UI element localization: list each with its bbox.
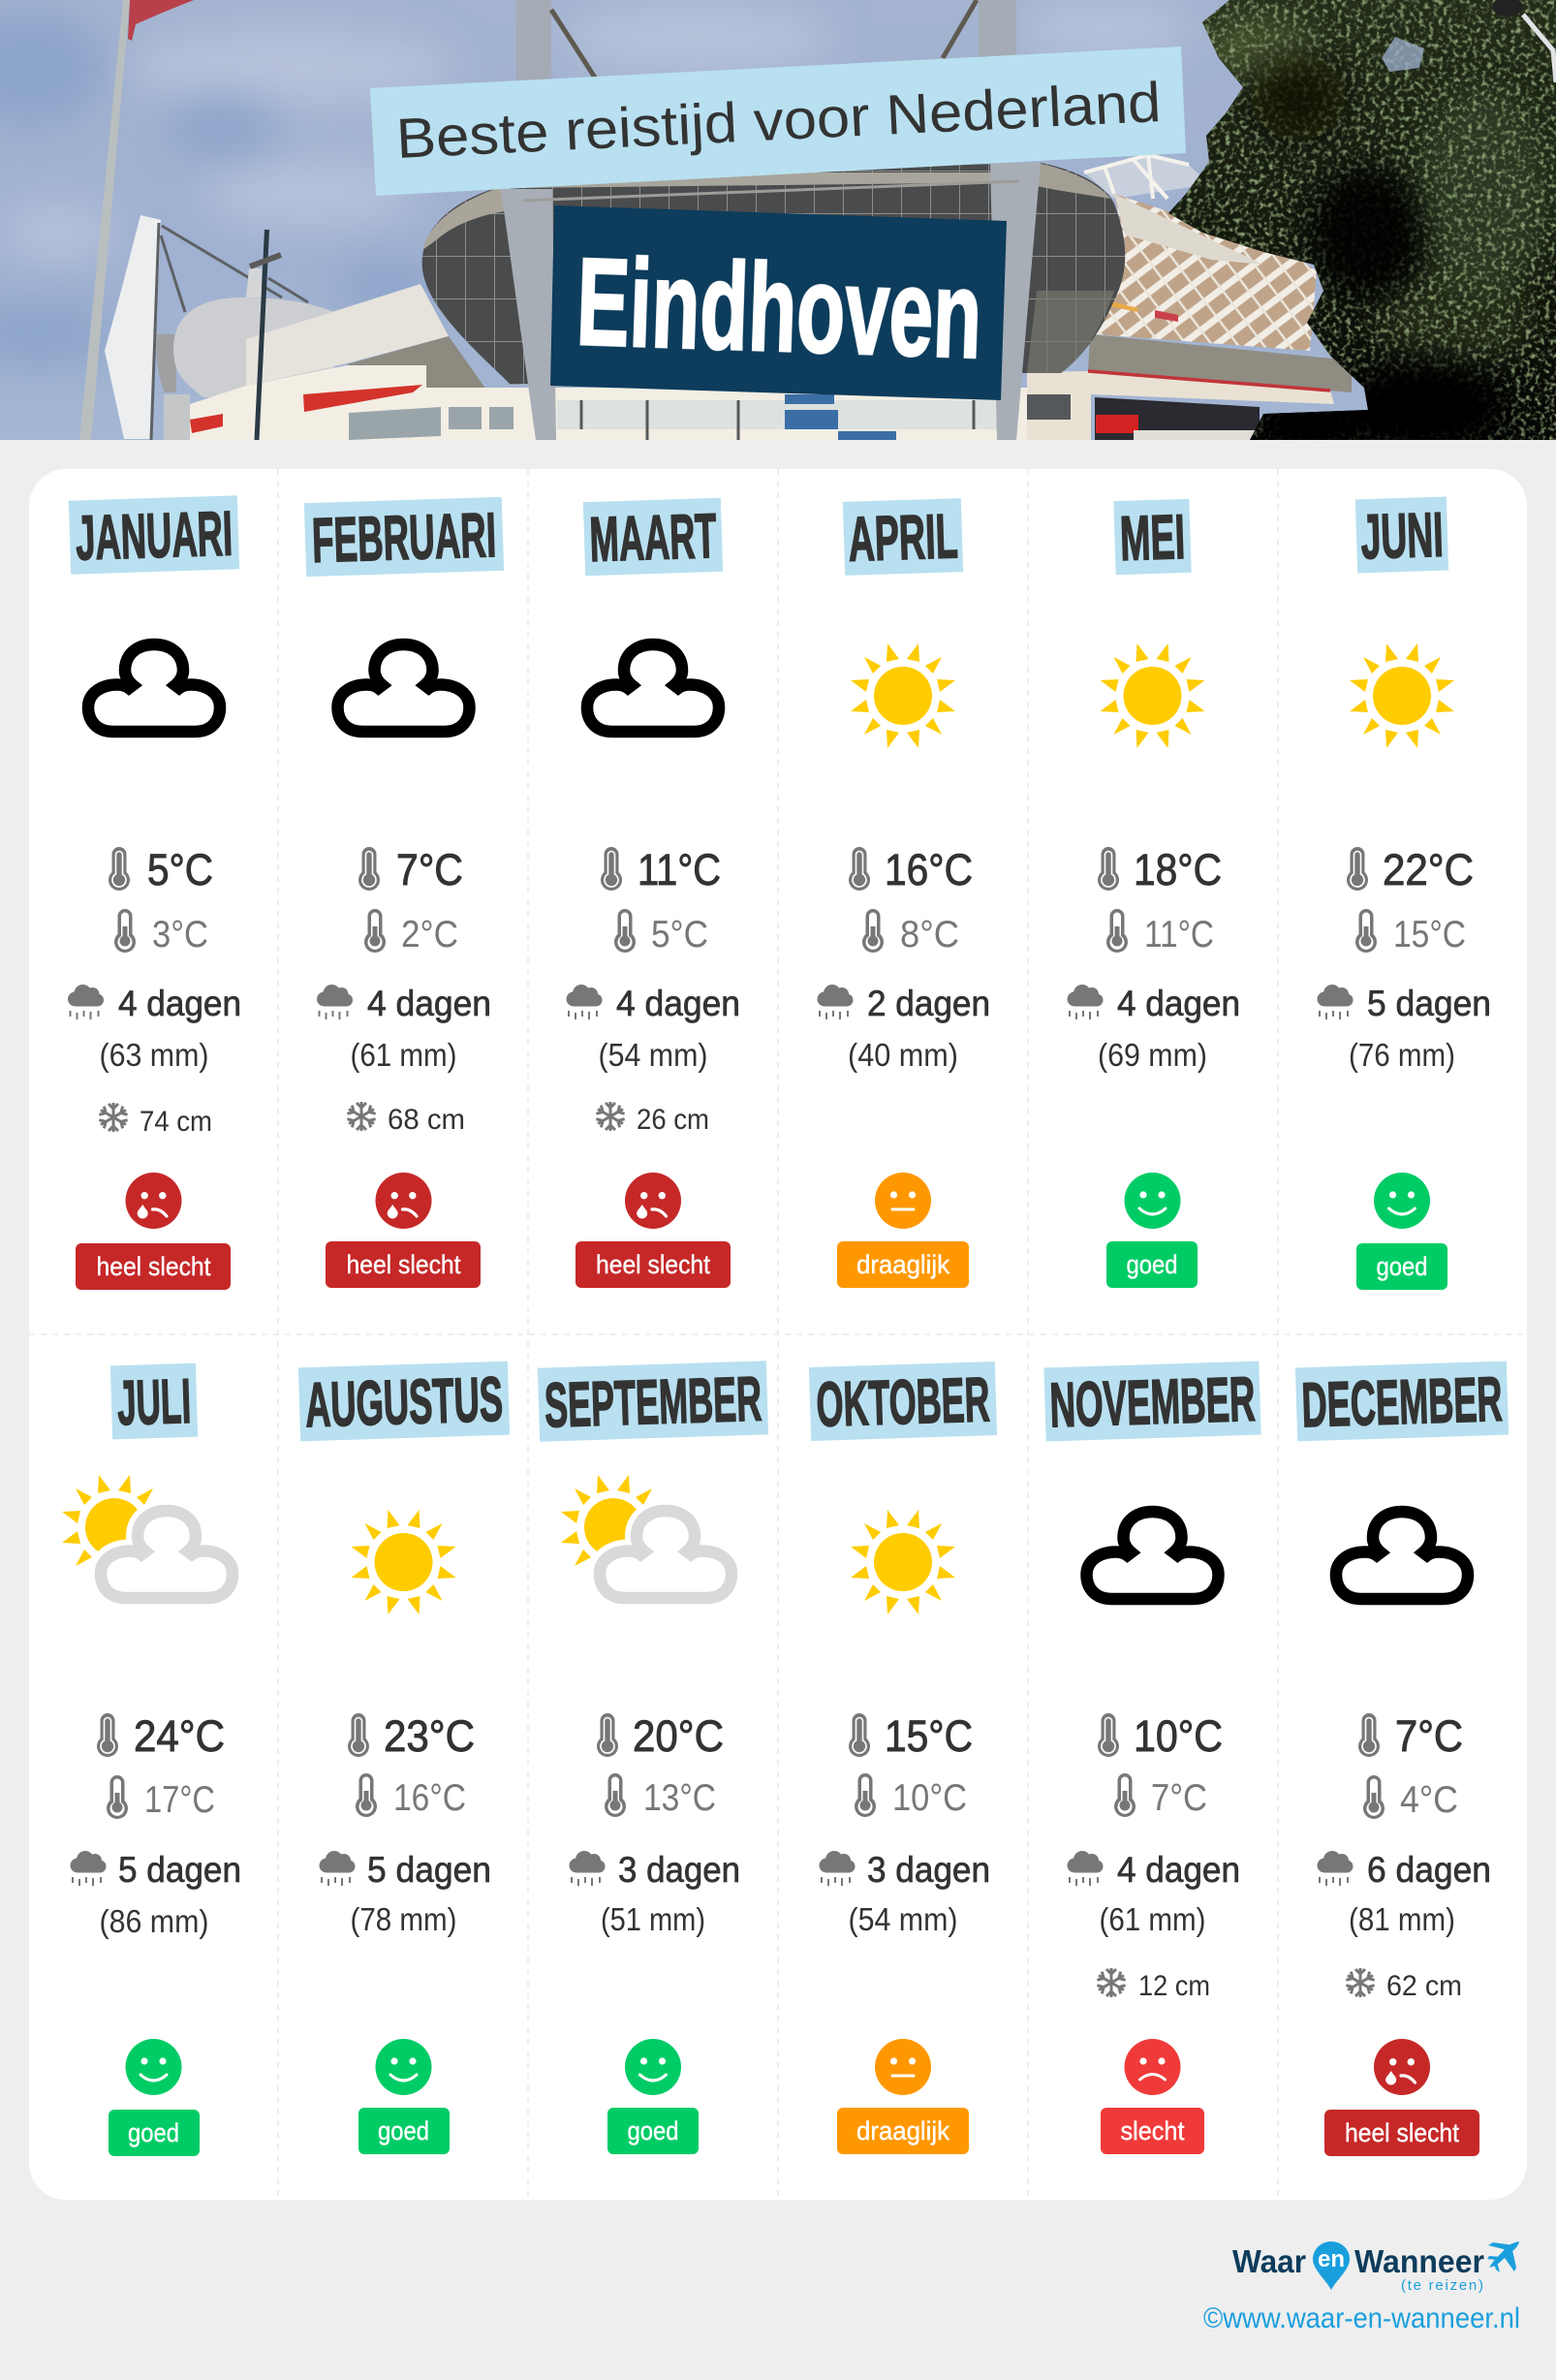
rain days <box>320 1850 491 1890</box>
rainfall: (54 mm) <box>849 1901 957 1937</box>
min temperature <box>614 909 708 955</box>
rating badge <box>1101 2108 1204 2154</box>
photo: PSV stadium under a cloudy sky <box>0 0 1556 465</box>
rating badge: goed <box>1376 1252 1428 1281</box>
rating face <box>875 1173 931 1229</box>
max temperature <box>849 1711 973 1761</box>
rain days: 3 dagen <box>618 1850 740 1890</box>
rainfall: (54 mm) <box>599 1037 707 1073</box>
max temperature: 11°C <box>638 845 721 894</box>
max temperature <box>1098 845 1222 894</box>
max temperature: 16°C <box>885 845 973 894</box>
max temperature <box>97 1711 225 1761</box>
rainfall: (61 mm) <box>351 1037 457 1073</box>
rating badge <box>576 1241 731 1288</box>
min temperature <box>1114 1773 1207 1819</box>
max temperature: 18°C <box>1134 845 1222 894</box>
rain days: 4 dagen <box>1117 984 1240 1023</box>
min temperature: 11°C <box>1144 914 1214 955</box>
rating badge <box>1106 1241 1198 1288</box>
logo word: Wanneer: Wanneer <box>1354 2243 1484 2279</box>
month label <box>809 1362 997 1441</box>
rating face <box>376 2039 432 2095</box>
rating face <box>625 1173 681 1229</box>
min temperature: 17°C <box>144 1779 215 1821</box>
website url: ©www.waar-en-wanneer.nl <box>1203 2302 1520 2334</box>
month label: OKTOBER <box>815 1363 991 1440</box>
icon: sun <box>851 643 955 748</box>
rain days <box>317 984 491 1023</box>
rating badge: heel slecht <box>97 1252 211 1281</box>
min temperature <box>364 909 458 955</box>
rating badge <box>109 2110 200 2156</box>
rainfall: (81 mm) <box>1349 1901 1455 1937</box>
rating badge <box>837 2108 969 2154</box>
rating face <box>1124 2039 1180 2095</box>
max temperature: 23°C <box>384 1711 475 1761</box>
month label <box>538 1361 768 1442</box>
rating badge: goed <box>378 2116 429 2145</box>
rating badge: goed <box>128 2118 179 2147</box>
icon: cloud <box>1336 1512 1468 1599</box>
panel: september <box>538 1361 768 2154</box>
snow: 62 cm <box>1386 1970 1462 2002</box>
rain days <box>1068 1850 1240 1890</box>
city name: Eindhoven <box>575 233 984 385</box>
icon: location pin <box>1313 2241 1350 2290</box>
rain days <box>566 984 740 1023</box>
icon: cloud <box>88 644 220 732</box>
max temperature: 24°C <box>134 1711 225 1761</box>
month label: FEBRUARI <box>311 499 497 576</box>
rainfall: (40 mm) <box>848 1037 958 1073</box>
min temperature: 2°C <box>401 914 458 955</box>
rain days: 4 dagen <box>616 984 740 1023</box>
rain days: 6 dagen <box>1367 1850 1491 1890</box>
min temperature: 10°C <box>892 1777 967 1819</box>
month label <box>1355 497 1448 573</box>
panel: maart <box>566 498 740 1288</box>
icon: cloud <box>587 644 719 732</box>
icon: airplane <box>1487 2241 1519 2272</box>
rating badge <box>837 1241 969 1288</box>
rating badge <box>1356 1243 1447 1290</box>
month label: AUGUSTUS <box>304 1363 504 1440</box>
logo: Waar en Wanneer <box>1232 2241 1519 2294</box>
month label <box>583 498 723 576</box>
rain days <box>68 984 241 1023</box>
max temperature <box>597 1711 724 1761</box>
max temperature <box>348 1711 475 1761</box>
panel: oktober <box>809 1362 997 2154</box>
min temperature <box>605 1773 716 1819</box>
subtitle banner <box>370 47 1186 196</box>
icon: sun <box>351 1510 455 1614</box>
rain days <box>820 1850 990 1890</box>
month label: MEI <box>1119 501 1186 574</box>
rain days <box>70 1850 241 1890</box>
rating badge: draaglijk <box>856 1250 949 1279</box>
month label <box>1043 1362 1261 1441</box>
rating face <box>126 1173 182 1229</box>
rainfall: (61 mm) <box>1099 1901 1205 1937</box>
rain days <box>1318 1850 1491 1890</box>
month label: NOVEMBER <box>1048 1363 1257 1440</box>
rain days: 3 dagen <box>867 1850 990 1890</box>
icon: sun behind cloud <box>62 1475 233 1598</box>
max temperature: 15°C <box>885 1711 973 1761</box>
panel: december <box>1295 1362 1509 2156</box>
panel: januari <box>68 495 241 1290</box>
max temperature <box>1098 1711 1223 1761</box>
rainfall: (63 mm) <box>99 1037 209 1073</box>
panel: augustus <box>298 1362 510 2154</box>
snow <box>1097 1968 1210 2002</box>
rain days <box>1318 984 1491 1023</box>
month label: JUNI <box>1359 499 1445 572</box>
month label <box>304 497 504 577</box>
snow <box>347 1102 465 1136</box>
max temperature <box>358 845 463 894</box>
month label <box>298 1362 510 1441</box>
subtitle text: Beste reistijd voor Nederland <box>394 71 1163 171</box>
month label <box>69 495 239 575</box>
logo word: Waar: Waar <box>1232 2243 1306 2279</box>
snow <box>596 1102 709 1136</box>
city title banner <box>550 205 1007 400</box>
rating badge: heel slecht <box>1345 2118 1459 2147</box>
snow: 26 cm <box>637 1104 709 1136</box>
rainfall: (51 mm) <box>601 1901 705 1937</box>
icon: cloud <box>337 644 469 732</box>
min temperature <box>855 1773 967 1819</box>
rain days <box>570 1850 740 1890</box>
max temperature <box>1347 845 1474 894</box>
month label <box>1113 499 1192 575</box>
rating badge <box>1324 2110 1479 2156</box>
max temperature <box>109 845 213 894</box>
min temperature: 5°C <box>651 914 708 955</box>
rating badge <box>326 1241 481 1288</box>
min temperature <box>107 1775 215 1821</box>
max temperature: 5°C <box>147 845 213 894</box>
month label: APRIL <box>847 500 959 575</box>
rating badge: heel slecht <box>596 1250 710 1279</box>
panel: april <box>818 498 990 1288</box>
rainfall: (69 mm) <box>1098 1037 1207 1073</box>
max temperature: 7°C <box>396 845 463 894</box>
rating badge: goed <box>628 2116 678 2145</box>
icon: cloud <box>1087 1512 1219 1599</box>
snow <box>1346 1968 1462 2002</box>
rainfall: (86 mm) <box>99 1903 209 1939</box>
rating face <box>1374 2039 1430 2095</box>
rating badge: goed <box>1126 1250 1178 1279</box>
panel: juli <box>62 1363 241 2156</box>
min temperature: 3°C <box>152 914 208 955</box>
rating face <box>625 2039 681 2095</box>
max temperature: 20°C <box>633 1711 724 1761</box>
rating face <box>376 1173 432 1229</box>
min temperature: 8°C <box>900 914 959 955</box>
min temperature: 13°C <box>643 1777 716 1819</box>
icon: sun <box>1101 643 1205 748</box>
rain days <box>818 984 990 1023</box>
panel: februari <box>304 497 504 1288</box>
panel: monthly calendar card <box>29 469 1527 2200</box>
panel: juni <box>1318 497 1491 1290</box>
max temperature <box>601 845 721 894</box>
logo tagline: (te reizen) <box>1401 2277 1483 2294</box>
rain days: 5 dagen <box>1367 984 1491 1023</box>
snow: 68 cm <box>388 1104 465 1136</box>
panel: mei <box>1068 499 1240 1288</box>
rain days: 4 dagen <box>1117 1850 1240 1890</box>
snow <box>99 1103 212 1138</box>
month label: JANUARI <box>75 497 233 574</box>
rain days: 4 dagen <box>118 984 241 1023</box>
max temperature <box>1358 1711 1463 1761</box>
icon: sun <box>1350 643 1454 748</box>
rainfall: (78 mm) <box>351 1901 457 1937</box>
rating face <box>1124 1173 1180 1229</box>
min temperature: 15°C <box>1393 914 1466 955</box>
snow: 12 cm <box>1138 1970 1210 2002</box>
rain days <box>1068 984 1240 1023</box>
month label <box>843 498 963 576</box>
max temperature: 22°C <box>1383 845 1474 894</box>
max temperature <box>849 845 973 894</box>
rating badge <box>76 1243 231 1290</box>
rain days: 5 dagen <box>367 1850 491 1890</box>
rating face <box>1374 1173 1430 1229</box>
snow: 74 cm <box>140 1106 212 1138</box>
min temperature <box>114 909 208 955</box>
rain days: 4 dagen <box>367 984 491 1023</box>
rating badge: heel slecht <box>347 1250 461 1279</box>
rating face <box>875 2039 931 2095</box>
rain days: 2 dagen <box>867 984 990 1023</box>
rating badge: draaglijk <box>856 2116 949 2145</box>
rating face <box>126 2039 182 2095</box>
icon: sun behind cloud <box>561 1475 731 1598</box>
min temperature: 16°C <box>393 1777 466 1819</box>
icon: sun <box>851 1510 955 1614</box>
min temperature: 4°C <box>1400 1779 1458 1821</box>
month label: JULI <box>116 1365 192 1438</box>
rain days: 5 dagen <box>118 1850 241 1890</box>
rating badge <box>358 2108 450 2154</box>
rainfall: (76 mm) <box>1349 1037 1455 1073</box>
min temperature <box>1355 909 1466 955</box>
min temperature <box>356 1773 466 1819</box>
month label: SEPTEMBER <box>544 1362 762 1440</box>
max temperature: 10°C <box>1134 1711 1223 1761</box>
rating badge: slecht <box>1120 2116 1185 2145</box>
min temperature: 7°C <box>1151 1777 1207 1819</box>
min temperature <box>862 909 959 955</box>
rating badge <box>607 2108 699 2154</box>
month label: MAART <box>588 500 718 575</box>
max temperature: 7°C <box>1395 1711 1463 1761</box>
month label <box>110 1363 198 1439</box>
min temperature <box>1363 1775 1458 1821</box>
min temperature <box>1106 909 1214 955</box>
panel: november <box>1043 1362 1261 2154</box>
column and row dividers <box>29 469 1527 2200</box>
icon: location pin: en <box>1318 2246 1345 2272</box>
